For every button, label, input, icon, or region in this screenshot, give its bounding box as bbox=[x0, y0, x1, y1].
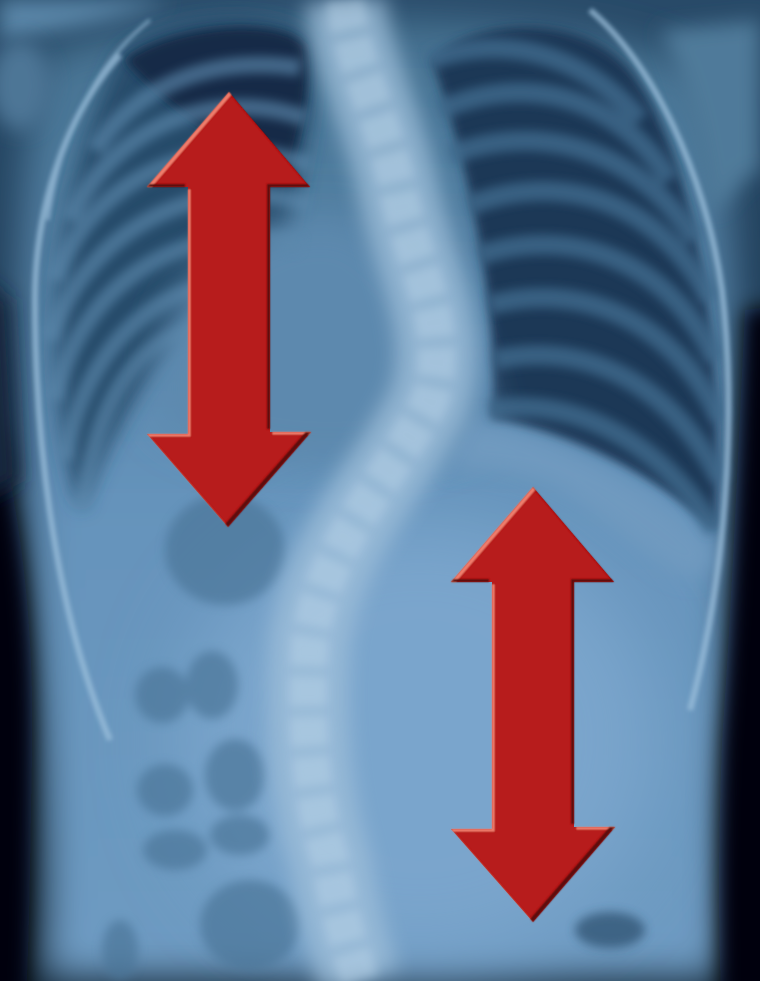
left-side lung: dark field bbox=[57, 19, 313, 510]
dark edges: lower left and right bbox=[0, 250, 760, 981]
right-side lung: dark field bbox=[432, 28, 717, 530]
arrow: lower-right double-headed bbox=[451, 487, 615, 922]
ribs: left side bbox=[50, 65, 310, 510]
rib cage outline bbox=[35, 10, 728, 740]
arrow: upper-left double-headed bbox=[147, 92, 311, 527]
bowel gas: lower left bbox=[102, 495, 645, 980]
ribs: right side bbox=[430, 48, 720, 530]
spine: curved vertebral column bbox=[308, 0, 437, 981]
shoulders: upper corners bbox=[0, 0, 760, 209]
heart and diaphragm shadow bbox=[160, 218, 715, 577]
